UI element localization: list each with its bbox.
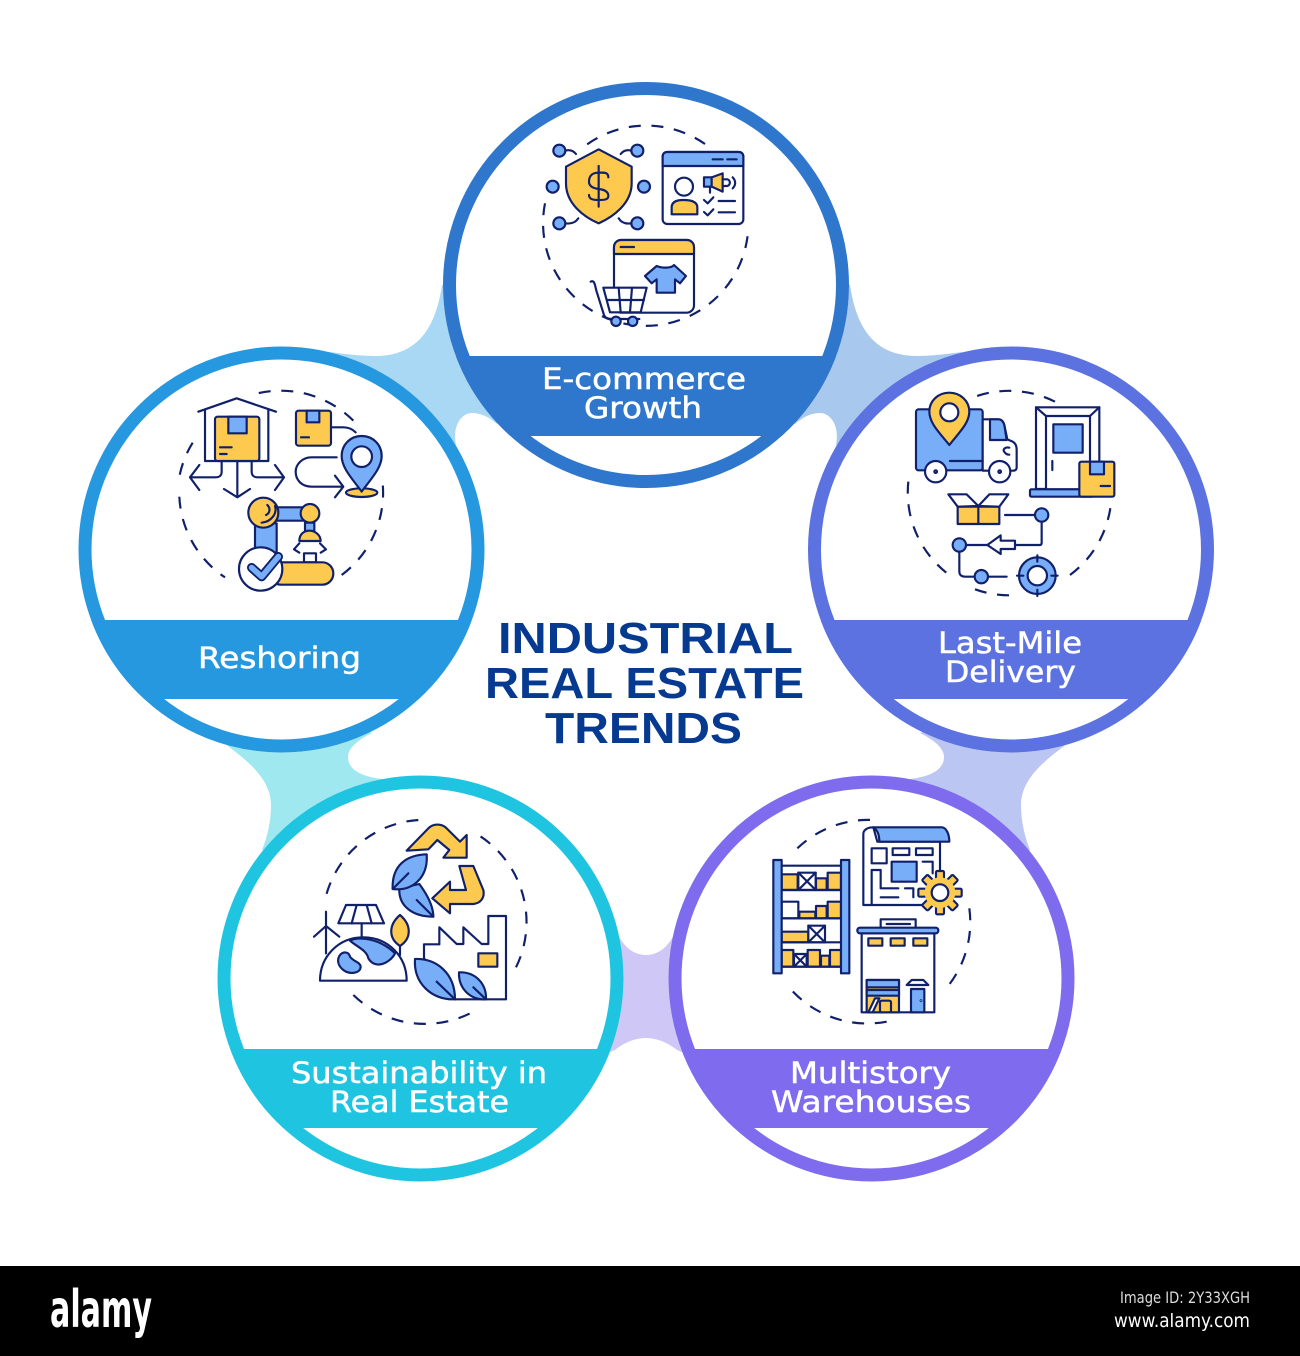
icon: e-commerce bbox=[543, 126, 748, 326]
panel: E-commerce Growth bbox=[443, 82, 849, 488]
label: E-commerce Growth: E-commerce bbox=[542, 362, 746, 396]
label: Sustainability in Real Estate bbox=[291, 1056, 547, 1119]
footer: stock image bar: Image ID: 2Y33XGH bbox=[1120, 1288, 1250, 1307]
panel: Multistory Warehouses bbox=[668, 776, 1075, 1182]
label: Sustainability in Real Estate: Real Estate bbox=[330, 1085, 509, 1119]
footer: stock image bar: www.alamy.com bbox=[1114, 1310, 1250, 1332]
label: E-commerce Growth: Growth bbox=[584, 391, 702, 425]
icon: sustainability bbox=[314, 820, 527, 1024]
connector: Reshoring to Sustainability bbox=[210, 700, 400, 900]
label: Multistory Warehouses: Multistory bbox=[790, 1056, 951, 1090]
label: Sustainability in Real Estate: Sustainability in bbox=[291, 1056, 547, 1090]
label: Multistory Warehouses: Warehouses bbox=[771, 1085, 971, 1119]
panel: Sustainability in Real Estate bbox=[217, 776, 624, 1182]
footer: stock image bar bbox=[0, 1266, 1300, 1356]
label: Last-Mile Delivery: Delivery bbox=[945, 655, 1076, 689]
label: Multistory Warehouses bbox=[771, 1056, 971, 1119]
icon: reshoring bbox=[179, 391, 383, 591]
label: Reshoring: Reshoring bbox=[198, 641, 361, 675]
title: INDUSTRIAL bbox=[498, 614, 793, 663]
label: E-commerce Growth bbox=[542, 362, 746, 425]
title: TRENDS bbox=[545, 704, 742, 753]
label: Last-Mile Delivery: Last-Mile bbox=[938, 626, 1082, 660]
title: REAL ESTATE bbox=[485, 659, 804, 708]
connector: Sustainability to Multistory bbox=[590, 920, 700, 1060]
icon: warehouses bbox=[773, 820, 970, 1023]
icon: delivery bbox=[908, 391, 1114, 596]
panel: Last-Mile Delivery bbox=[808, 346, 1214, 752]
title bbox=[485, 614, 804, 753]
connector: E-commerce to Last-Mile bbox=[732, 285, 962, 480]
connector: Reshoring to E-commerce bbox=[330, 285, 560, 480]
panel: Reshoring bbox=[78, 346, 485, 752]
label: Last-Mile Delivery bbox=[938, 626, 1082, 689]
connector: Last-Mile to Multistory bbox=[892, 700, 1082, 900]
footer: stock image bar: alamy bbox=[50, 1280, 152, 1340]
